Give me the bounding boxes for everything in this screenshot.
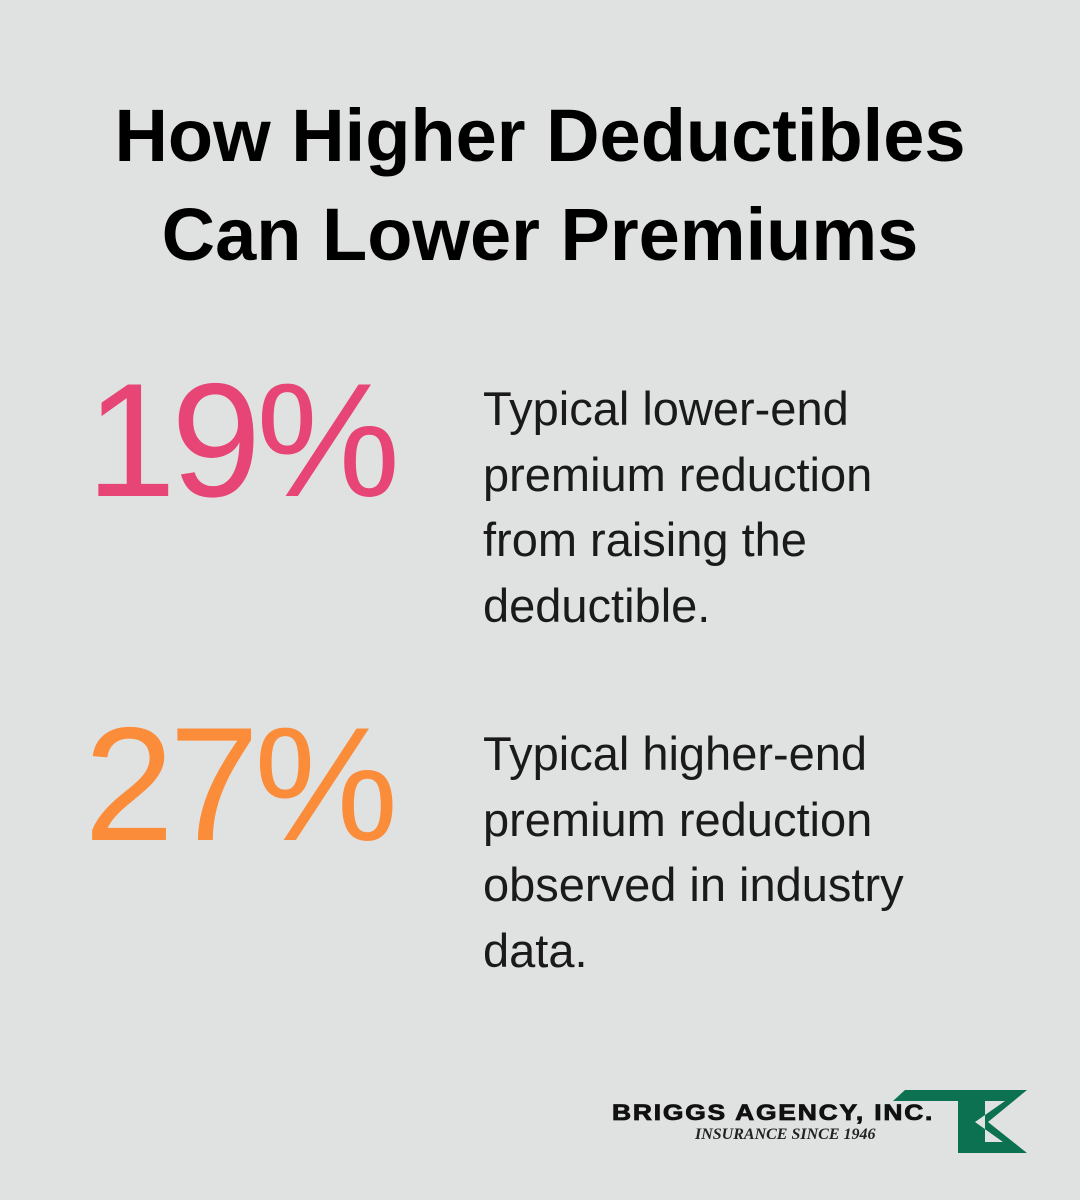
- logo: [612, 1090, 1027, 1153]
- title: Can Lower Premiums: [162, 193, 918, 276]
- title: How Higher Deductibles: [114, 94, 966, 177]
- title: [114, 94, 966, 276]
- logo tagline: INSURANCE SINCE 1946: [695, 1126, 876, 1143]
- stat: 27%: 27%: [84, 694, 393, 875]
- text: 27% description: Typical higher-end: [483, 727, 867, 780]
- text: 19% description: from raising the: [483, 513, 807, 566]
- text: 27% description: observed in industry: [483, 858, 904, 911]
- text: 19% description: [483, 382, 872, 632]
- text: 27% description: premium reduction: [483, 792, 872, 846]
- text: 19% description: premium reduction: [483, 448, 872, 500]
- text: 27% description: [483, 727, 904, 976]
- stat: 19%: 19%: [86, 350, 395, 531]
- text: 19% description: deductible.: [483, 578, 710, 632]
- text: 27% description: data.: [483, 924, 588, 976]
- logo mark: [893, 1090, 1027, 1153]
- text: 19% description: Typical lower-end: [483, 382, 849, 435]
- logo text: BRIGGS AGENCY, INC.: [612, 1100, 934, 1125]
